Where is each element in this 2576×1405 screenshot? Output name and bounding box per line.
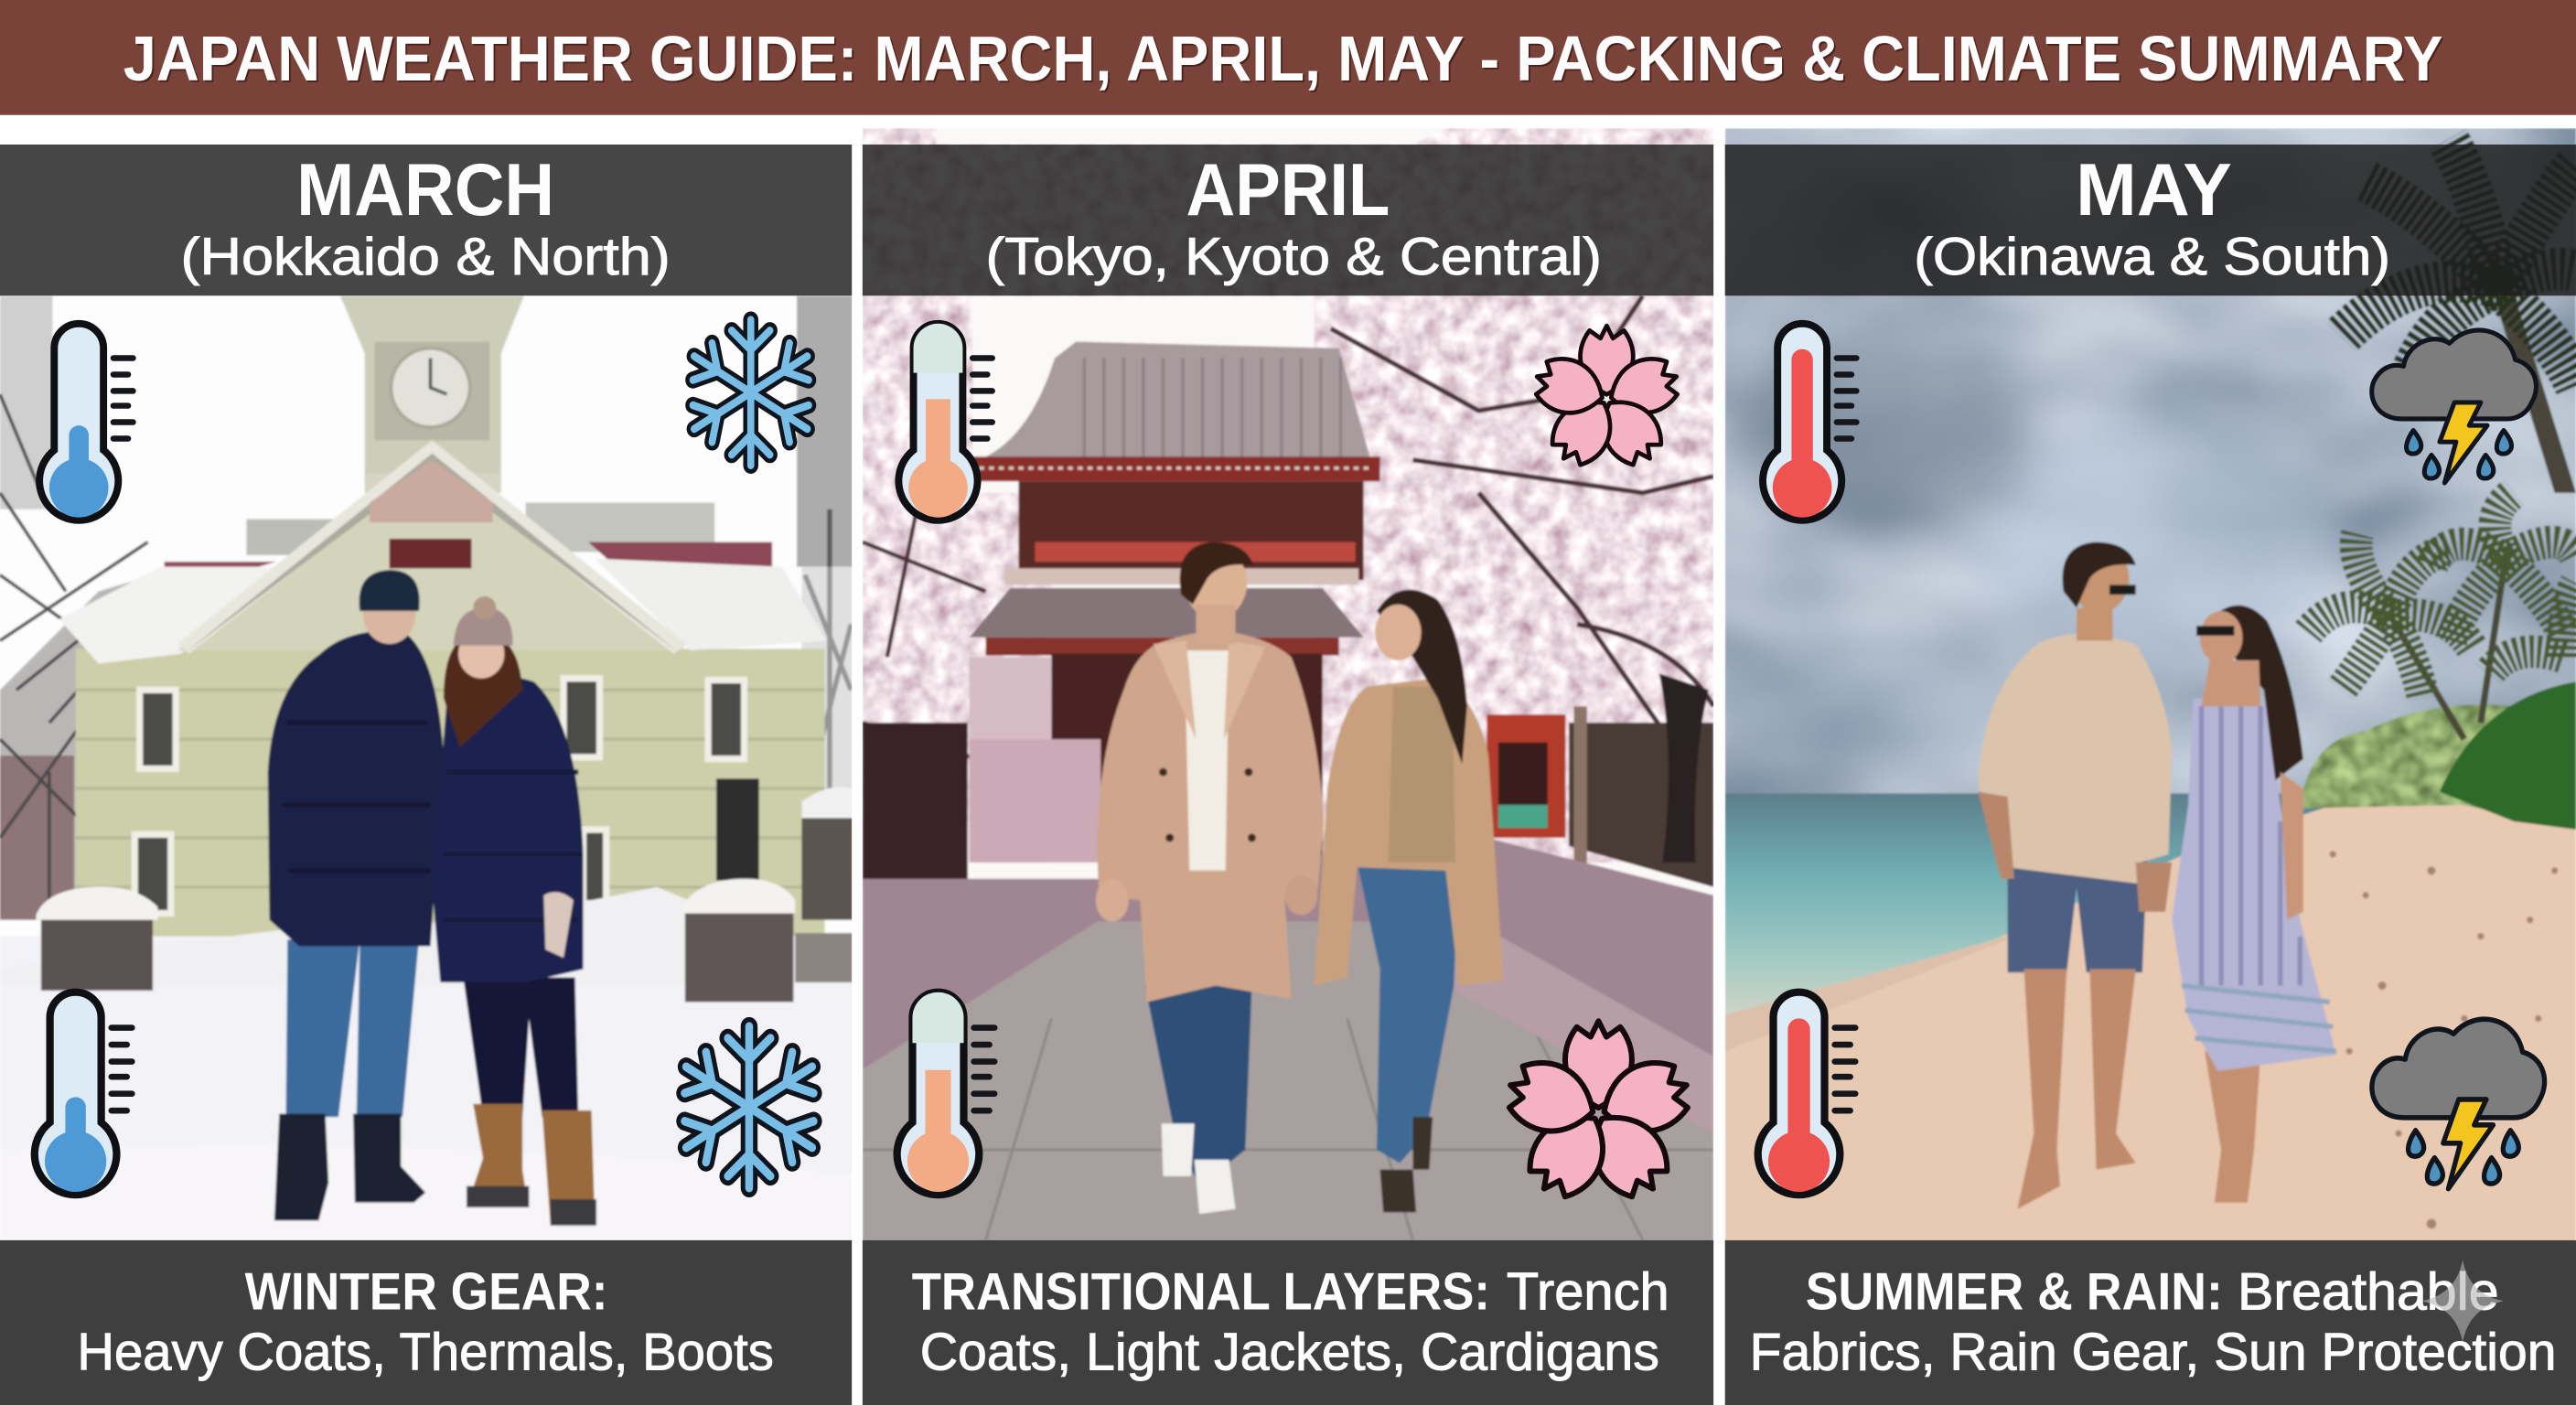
man [2008,854,2147,972]
month header: April [863,145,1713,295]
icon: storm cloud top [2372,330,2536,483]
panel: May [1709,128,2576,1405]
packing caption: May [1725,1240,2576,1405]
month header: March: MARCH [296,149,554,231]
packing caption: March [0,1240,852,1405]
icon: mild thermometer top [898,324,993,520]
photo: stormy beach with palms and couple [1709,128,2576,1249]
title banner: JAPAN WEATHER GUIDE: MARCH, APRIL, MAY - PACKING & CLIMATE SUMMARY [123,23,2443,94]
icon: cherry blossom top [1529,326,1685,474]
packing caption: April: TRANSITIONAL LAYERS: [912,1262,1490,1321]
title banner [0,0,2576,115]
packing caption: May: Breathable [2238,1262,2499,1321]
man [285,939,419,1117]
packing caption: May: Fabrics, Rain Gear, Sun Protection [1750,1324,2556,1382]
icon: mild thermometer bottom [897,992,994,1195]
woman [1357,863,1459,1163]
packing caption: March: WINTER GEAR: [245,1262,607,1321]
photo: snowy Sapporo clock tower with couple [0,295,853,1239]
icon: snowflake bottom [675,1026,822,1188]
month header: May [1725,145,2576,295]
month header: March [0,145,852,295]
packing caption: March: Heavy Coats, Thermals, Boots [77,1324,774,1382]
month header: April: APRIL [1186,149,1390,231]
icon: hot thermometer bottom [1758,992,1855,1195]
packing caption: April [863,1240,1713,1405]
packing caption: April: Trench [1507,1262,1669,1321]
woman [2205,1051,2260,1203]
panel: April [863,128,1713,1405]
icon: storm cloud bottom [2372,1019,2545,1189]
icon: snowflake top [684,320,817,466]
icon: cold thermometer bottom [35,992,132,1195]
icon: hot thermometer top [1763,324,1856,520]
icon: cold thermometer top [39,324,133,520]
packing caption: April: Coats, Light Jackets, Cardigans [920,1324,1659,1382]
month header: May: (Okinawa & South) [1914,228,2390,286]
photo: cherry blossoms, temple gate and couple [863,128,1713,1249]
woman [463,978,578,1117]
packing caption: May: SUMMER & RAIN: [1806,1262,2223,1321]
man [1145,986,1251,1186]
watermark sparkle [2421,1260,2504,1342]
panel: March [0,145,854,1405]
icon: cherry blossom bottom [1500,1021,1697,1208]
month header: May: MAY [2076,149,2232,231]
month header: March: (Hokkaido & North) [181,228,671,286]
month header: April: (Tokyo, Kyoto & Central) [986,228,1602,286]
